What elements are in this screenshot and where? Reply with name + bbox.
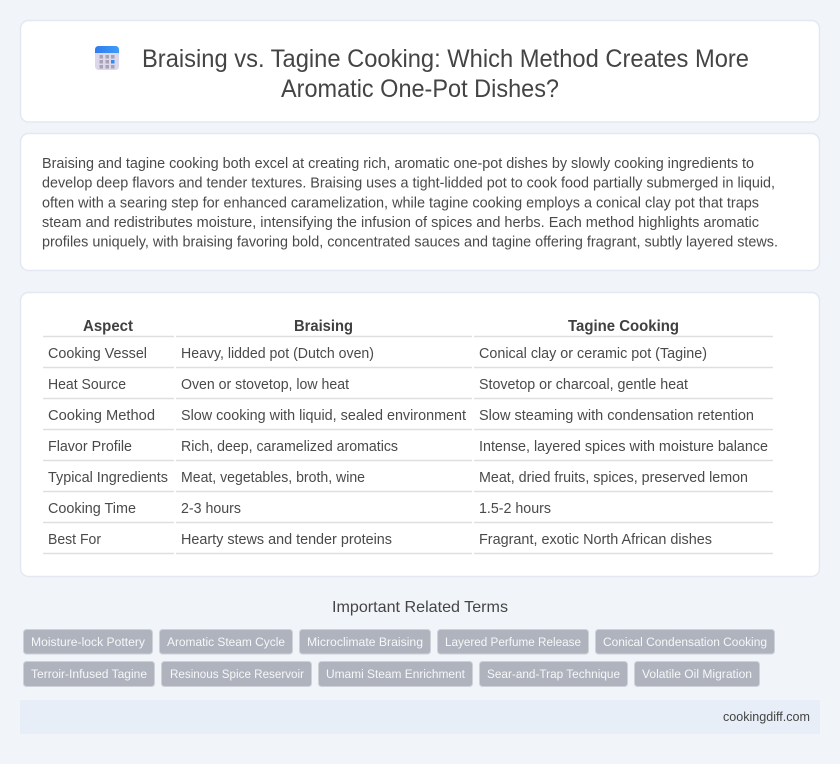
table row: cooking time: 2-3 hours	[181, 501, 241, 517]
tag	[318, 662, 472, 686]
heading: related terms: Important Related Terms	[332, 599, 508, 616]
table row: heat source	[48, 377, 688, 393]
text block: introduction: develop deep flavors and tender textures. Braising uses a tight-lidded pot to cook food partially submerged in liquid,	[42, 176, 775, 192]
table row: flavor profile	[48, 439, 768, 455]
text block: introduction: profiles uniquely, with braising favoring bold, concentrated sauces and tagine offering fragrant, subtly layered stews.	[42, 234, 778, 250]
panel: header	[20, 20, 820, 122]
table row: flavor profile: Rich, deep, caramelized aromatics	[181, 439, 398, 455]
tag: Umami Steam Enrichment	[326, 667, 466, 681]
table row: best for: Hearty stews and tender proteins	[181, 532, 392, 548]
tag	[596, 630, 774, 654]
tag	[480, 662, 628, 686]
table header: Tagine Cooking	[568, 318, 679, 335]
tag	[634, 662, 760, 686]
footer	[20, 700, 820, 734]
table row: cooking vessel	[48, 346, 707, 362]
table row: typical ingredients: Meat, dried fruits, spices, preserved lemon	[479, 470, 748, 486]
table row: cooking vessel: Heavy, lidded pot (Dutch oven)	[181, 346, 374, 362]
title	[142, 45, 749, 103]
table header	[83, 318, 679, 335]
tag	[160, 630, 292, 654]
text block: introduction: steam and redistributes moisture, intensifying the infusion of spices and herbs. Each method highlights aromatic	[42, 215, 759, 231]
tag: Moisture-lock Pottery	[31, 635, 146, 649]
tag: Terroir-Infused Tagine	[31, 667, 147, 681]
table row: typical ingredients: Typical Ingredients	[48, 470, 168, 486]
tag	[24, 630, 152, 654]
table header: Braising	[294, 318, 353, 335]
tag	[24, 662, 154, 686]
table row: cooking time	[48, 501, 551, 517]
table row: cooking method: Slow cooking with liquid, sealed environment	[181, 408, 466, 424]
title: Aromatic One-Pot Dishes?	[281, 75, 559, 103]
icon: calendar grid	[95, 46, 119, 70]
tag: Conical Condensation Cooking	[603, 635, 767, 649]
text block: introduction: often with a searing step for enhanced caramelization, while tagine cooking employs a conical clay pot that traps	[42, 196, 759, 212]
tags: related terms	[24, 630, 774, 686]
table row: cooking method	[48, 408, 754, 424]
tag	[300, 630, 430, 654]
table row: cooking method: Cooking Method	[48, 408, 155, 424]
table header: Aspect	[83, 318, 134, 335]
text block: introduction	[42, 156, 778, 250]
tag: Microclimate Braising	[307, 635, 423, 649]
table row: cooking time: Cooking Time	[48, 501, 136, 517]
table row: best for: Best For	[48, 532, 101, 548]
title: Braising vs. Tagine Cooking: Which Method Creates More	[142, 45, 749, 73]
table row: cooking vessel: Cooking Vessel	[48, 346, 147, 362]
table row: best for: Fragrant, exotic North African dishes	[479, 532, 712, 548]
table row: heat source: Oven or stovetop, low heat	[181, 377, 349, 393]
tag: Volatile Oil Migration	[642, 667, 752, 681]
table row: flavor profile: Flavor Profile	[48, 439, 132, 455]
table row: typical ingredients: Meat, vegetables, broth, wine	[181, 470, 365, 486]
table row: heat source: Heat Source	[48, 377, 126, 393]
table row: heat source: Stovetop or charcoal, gentle heat	[479, 377, 688, 393]
table row: typical ingredients	[48, 470, 748, 486]
table row: best for	[48, 532, 712, 548]
tag: Sear-and-Trap Technique	[487, 667, 620, 681]
table row: cooking time: 1.5-2 hours	[479, 501, 551, 517]
text block: introduction: Braising and tagine cooking both excel at creating rich, aromatic one-pot dishes by slowly cooking ingredients to	[42, 156, 754, 172]
table row: cooking vessel: Conical clay or ceramic pot (Tagine)	[479, 346, 707, 362]
tag: Layered Perfume Release	[445, 635, 581, 649]
tag	[438, 630, 588, 654]
table row: cooking method: Slow steaming with condensation retention	[479, 408, 754, 424]
tag: Aromatic Steam Cycle	[167, 635, 285, 649]
table row: flavor profile: Intense, layered spices with moisture balance	[479, 439, 768, 455]
footer: cookingdiff.com	[723, 710, 810, 724]
panel: introduction	[20, 134, 820, 270]
tag: Resinous Spice Reservoir	[170, 667, 304, 681]
tag	[162, 662, 312, 686]
panel: comparison table	[20, 292, 820, 576]
